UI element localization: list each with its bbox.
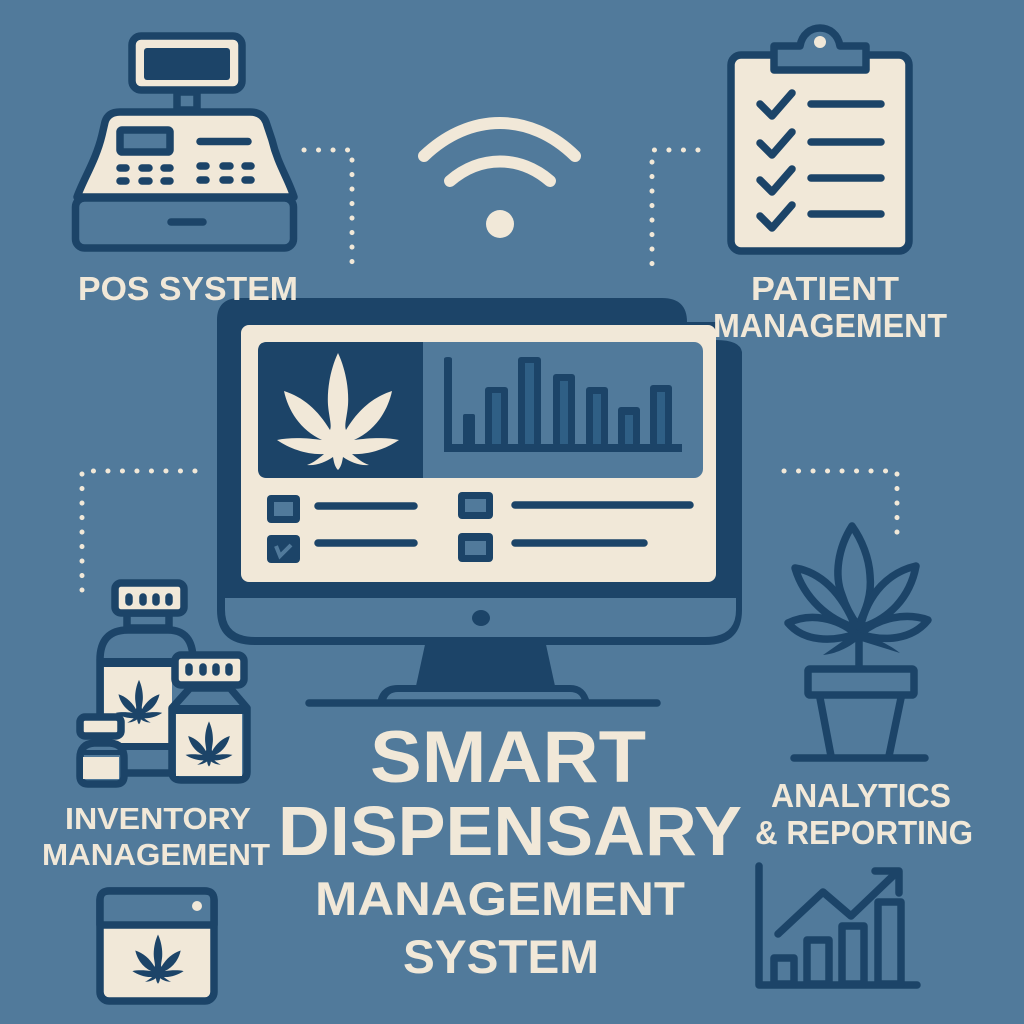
label: POS system: POS SYSTEM [78, 270, 298, 307]
icon: storage jar [100, 891, 214, 1001]
label: inventory management [42, 801, 270, 872]
icon: growth chart [759, 866, 917, 985]
screen panel [258, 342, 703, 478]
label: inventory management: MANAGEMENT [42, 837, 270, 872]
connector: analytics to monitor [784, 471, 897, 540]
title [278, 717, 742, 983]
icon: POS cash register [76, 36, 294, 248]
icon: potted plant [788, 526, 928, 758]
monitor body [217, 298, 742, 645]
small bottle [80, 743, 124, 784]
icon: wifi signal [424, 123, 575, 238]
monitor stand [416, 640, 555, 686]
connector: inventory to monitor [82, 471, 195, 590]
bar chart [444, 357, 682, 452]
label: inventory management: INVENTORY [65, 801, 251, 836]
camera dot [472, 610, 490, 626]
icon: medicine bottles [80, 583, 247, 784]
large bottle [127, 613, 169, 628]
title: DISPENSARY [278, 792, 742, 870]
medium bottle [172, 688, 247, 780]
label: analytics and reporting: ANALYTICS [771, 777, 951, 814]
checklist rows [267, 492, 690, 563]
label: analytics and reporting: & REPORTING [755, 814, 973, 851]
icon: cannabis leaf [277, 353, 399, 470]
label: patient management: PATIENT [751, 270, 899, 307]
connector: patient management to monitor [652, 150, 698, 268]
label: patient management [713, 270, 947, 344]
title: SMART [370, 717, 646, 798]
label: patient management: MANAGEMENT [713, 307, 947, 344]
icon: central monitor [217, 298, 742, 703]
icon: clipboard checklist [731, 28, 909, 251]
screen [241, 325, 716, 582]
title: MANAGEMENT [315, 872, 685, 925]
connector: POS to monitor [304, 150, 352, 268]
title: SYSTEM [403, 930, 599, 983]
label: analytics and reporting [755, 777, 973, 851]
